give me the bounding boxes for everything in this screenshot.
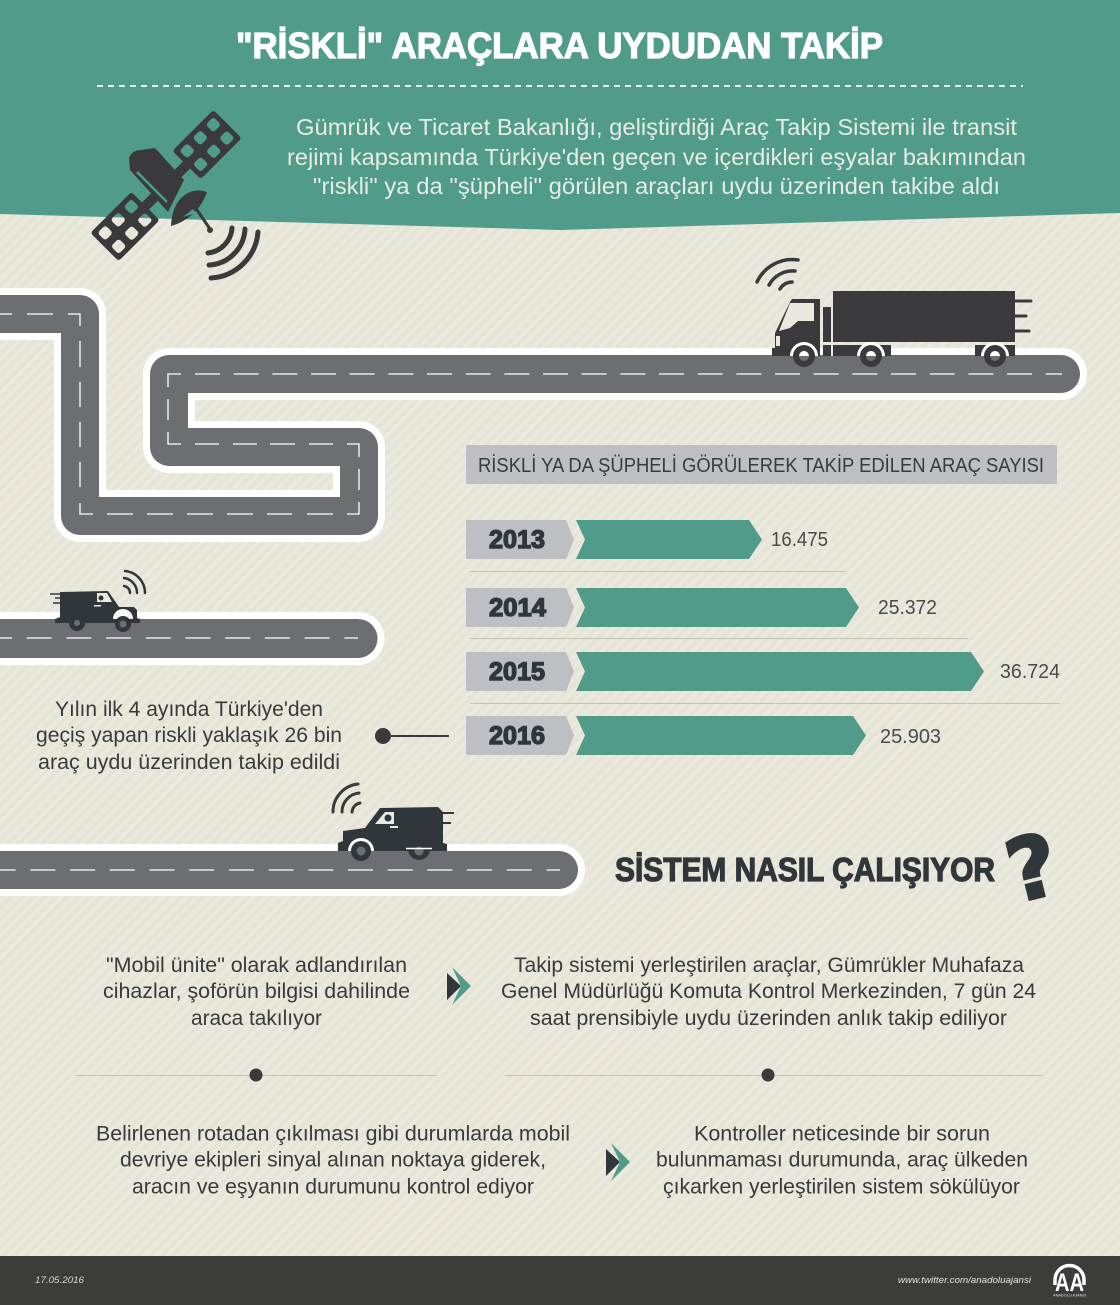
callout: first four months: Yılın ilk 4 ayında Türkiye'den [55,698,323,721]
title: "RİSKLİ" ARAÇLARA UYDUDAN TAKİP [236,25,883,66]
intro text: Gümrük ve Ticaret Bakanlığı, geliştirdiği Araç Takip Sistemi ile transit [296,114,1018,140]
step: monitoring [501,954,1036,1030]
callout: first four months: geçiş yapan riskli yaklaşık 26 bin [36,724,342,747]
chart heading: RİSKLİ YA DA ŞÜPHELİ GÖRÜLEREK TAKİP EDİLEN ARAÇ SAYISI [478,454,1044,477]
callout: first four months: araç uydu üzerinden takip edildi [38,751,340,774]
bar 2013 [466,520,828,559]
icon: satellite [90,110,258,278]
footer [0,1256,1120,1305]
step: removal [656,1122,1028,1198]
step: patrol check [96,1122,570,1198]
bar 2014: 2014 [489,594,546,622]
date: 17.05.2016 [35,1275,85,1286]
icon: small van [50,571,145,632]
callout: first four months [36,698,449,774]
chart heading [466,445,1057,484]
divider right [505,1068,1043,1082]
step: monitoring: Takip sistemi yerleştirilen araçlar, Gümrükler Muhafaza [514,954,1024,977]
logo: Anadolu Agency: ANADOLU AJANSI [1053,1292,1086,1298]
step: monitoring: saat prensibiyle uydu üzerinden anlık takip ediliyor [530,1007,1007,1030]
bar 2014: 25.372 [878,597,937,619]
arrow: step 1 to 2 [447,967,471,1005]
bar 2013: 16.475 [771,529,828,551]
step: patrol check: aracın ve eşyanın durumunu kontrol ediyor [132,1176,534,1198]
chart: tracked vehicles by year [466,445,1060,755]
bar 2016 [466,716,941,755]
step: mobile unit [103,954,410,1030]
logo: Anadolu Agency: AA [1055,1269,1084,1297]
step: patrol check: devriye ekipleri sinyal alınan noktaya giderek, [120,1148,546,1172]
icon: question mark: ? [996,814,1069,923]
step: patrol check: Belirlenen rotadan çıkılması gibi durumlarda mobil [96,1122,570,1146]
step: mobile unit: araca takılıyor [191,1007,322,1030]
road: lower road [0,844,560,896]
step: removal: bulunmaması durumunda, araç ülkeden [656,1148,1028,1172]
bar 2015: 36.724 [1000,661,1060,683]
bar 2016: 25.903 [880,726,941,748]
intro text [287,114,1026,199]
heading: how the system works: SİSTEM NASIL ÇALIŞIYOR [615,851,995,888]
road: winding top road [0,314,1062,516]
intro text: "riskli" ya da "şüpheli" görülen araçları uydu üzerinden takibe aldı [313,173,1000,199]
source url: www.twitter.com/anadoluajansi [898,1275,1032,1286]
divider left [75,1068,437,1082]
bar 2015: 2015 [489,658,545,686]
bar 2014 [466,588,937,627]
icon: large van [333,784,454,861]
road: middle road [0,612,358,665]
step: mobile unit: "Mobil ünite" olarak adlandırılan [106,954,407,977]
step: removal: çıkarken yerleştirilen sistem sökülüyor [663,1176,1020,1198]
bar 2016: 2016 [489,722,545,750]
icon: truck [757,260,1031,367]
bar 2013: 2013 [489,526,545,554]
header banner [0,0,1120,230]
step: mobile unit: cihazlar, şoförün bilgisi dahilinde [103,980,410,1003]
bar 2015 [466,652,1060,691]
arrow: step 3 to 4 [606,1143,630,1181]
heading: how the system works [615,814,1069,923]
step: removal: Kontroller neticesinde bir sorun [694,1122,990,1146]
intro text: rejimi kapsamında Türkiye'den geçen ve içerdikleri eşyalar bakımından [287,144,1026,170]
step: monitoring: Genel Müdürlüğü Komuta Kontrol Merkezinden, 7 gün 24 [501,980,1036,1003]
